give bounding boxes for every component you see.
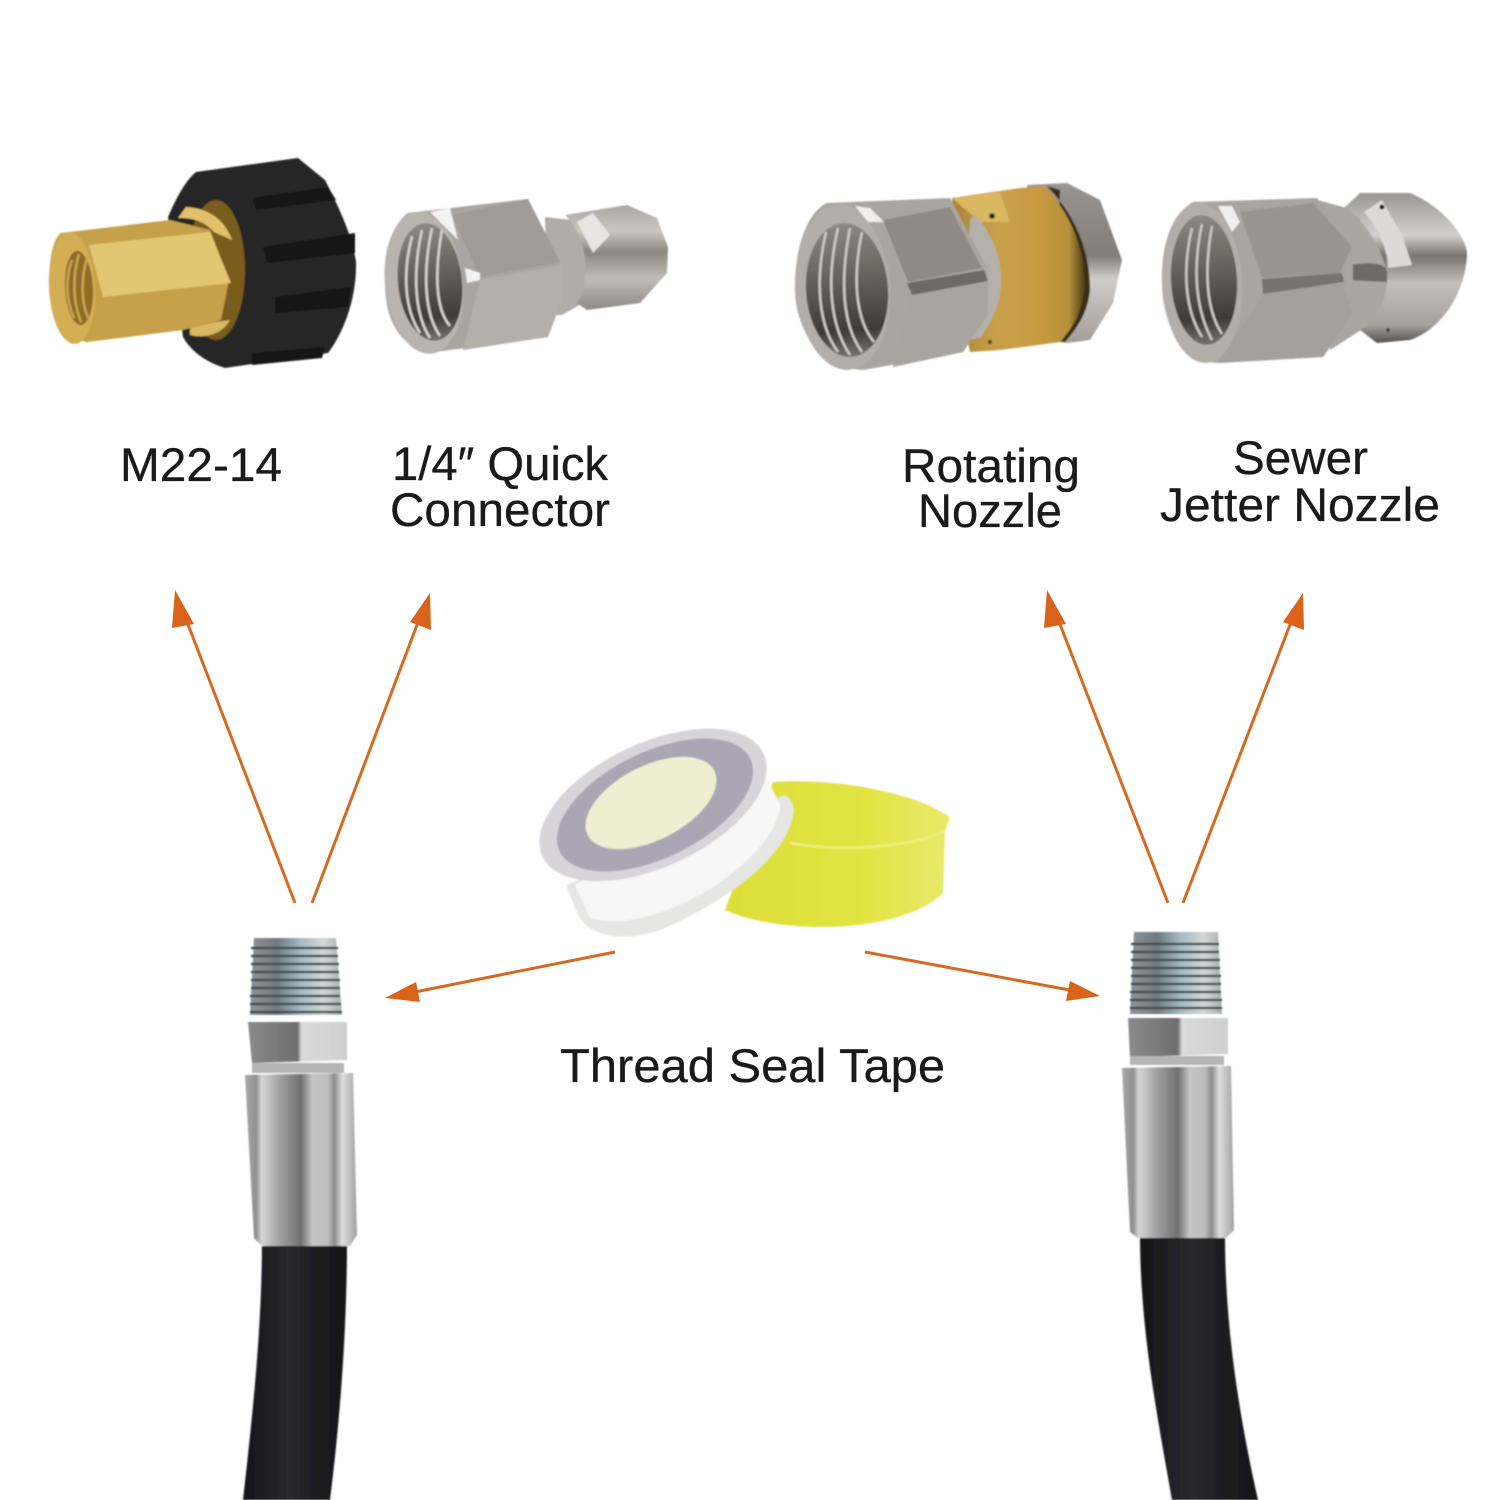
collar [252, 1063, 344, 1073]
hex nut [248, 1022, 347, 1063]
product: M22-14 fitting [46, 158, 356, 368]
arrow: right hose to sewer nozzle [1183, 593, 1304, 903]
hex dark band [907, 270, 988, 295]
label: 1/4 inch quick connector: Connector [390, 483, 610, 536]
nut ribs [252, 187, 355, 365]
brass hex body [49, 220, 229, 342]
grey roll face [536, 711, 774, 899]
label: sewer jetter nozzle [1160, 431, 1440, 531]
arrow: left hose to quick connector [312, 593, 431, 903]
label: sewer jetter nozzle: Jetter Nozzle [1160, 478, 1440, 531]
neck [1317, 200, 1387, 350]
product: rotating nozzle [790, 183, 1122, 373]
black hose [1140, 1235, 1258, 1500]
brass collar behind nut [187, 200, 245, 340]
arrow: tape to right hose [865, 952, 1100, 1001]
thread seal tape [516, 697, 950, 937]
right hose assembly [1122, 932, 1258, 1500]
dark ring [1047, 186, 1090, 342]
black hose [243, 1240, 347, 1500]
cap rim line [790, 831, 945, 848]
label: M22-14: M22-14 [120, 438, 282, 491]
ball head [1345, 193, 1467, 343]
yellow cap [725, 781, 950, 927]
hex lower flat [463, 265, 562, 350]
arrow: left hose to M22-14 [172, 590, 295, 903]
threaded bore [1168, 213, 1240, 347]
brass band [952, 186, 1085, 352]
threaded tip [250, 938, 342, 1015]
jet hole [1380, 204, 1384, 210]
black nut [168, 158, 356, 368]
label: sewer jetter nozzle: Sewer [1233, 431, 1368, 484]
label: thread seal tape: Thread Seal Tape [560, 1039, 945, 1092]
head bright facet [1364, 200, 1412, 268]
label: rotating nozzle [902, 439, 1080, 537]
hex edge highlights [430, 208, 480, 283]
brass lit top segment [952, 192, 1010, 222]
collar [1130, 1056, 1224, 1065]
upper flange disc [516, 697, 790, 913]
plug end [565, 205, 668, 310]
hex upper flat [883, 207, 982, 282]
brass threaded bore [63, 250, 95, 326]
front face rim [378, 208, 470, 358]
threaded tip [1130, 932, 1222, 1014]
neck [545, 217, 592, 315]
hex outline [1162, 198, 1353, 363]
front face rim [790, 201, 896, 373]
hex lower flat [1218, 282, 1353, 363]
crimped sleeve [1122, 1066, 1234, 1238]
hex outline [795, 198, 988, 370]
label: 1/4 inch quick connector [390, 437, 610, 536]
front face rim [1158, 201, 1246, 365]
crimped sleeve [245, 1073, 357, 1246]
hex nut [1128, 1018, 1228, 1057]
hex upper flat [1240, 203, 1352, 278]
arrow: tape to left hose [385, 952, 615, 1002]
brass lit face [89, 232, 231, 297]
hex upper flat [452, 199, 560, 277]
hex outline [385, 199, 562, 353]
tape roll white body [575, 775, 780, 921]
hex dark band [1262, 273, 1344, 294]
product: quick connector [378, 199, 668, 358]
steel end cap [1027, 183, 1122, 343]
brass front face [46, 231, 98, 345]
core hole [571, 738, 731, 868]
threaded bore [801, 220, 893, 360]
label: 1/4 inch quick connector: 1/4″ Quick [392, 437, 609, 490]
nozzle jet holes [989, 213, 995, 219]
steel neck ring [965, 215, 1001, 340]
arrow: right hose to rotating nozzle [1044, 590, 1168, 903]
left hose assembly [243, 938, 357, 1500]
hex lower flat [893, 285, 988, 367]
product: sewer jetter nozzle [1158, 193, 1467, 365]
label: rotating nozzle: Rotating [902, 439, 1080, 492]
lower flange [566, 795, 793, 937]
label: rotating nozzle: Nozzle [918, 484, 1062, 537]
threaded bore [392, 220, 468, 344]
